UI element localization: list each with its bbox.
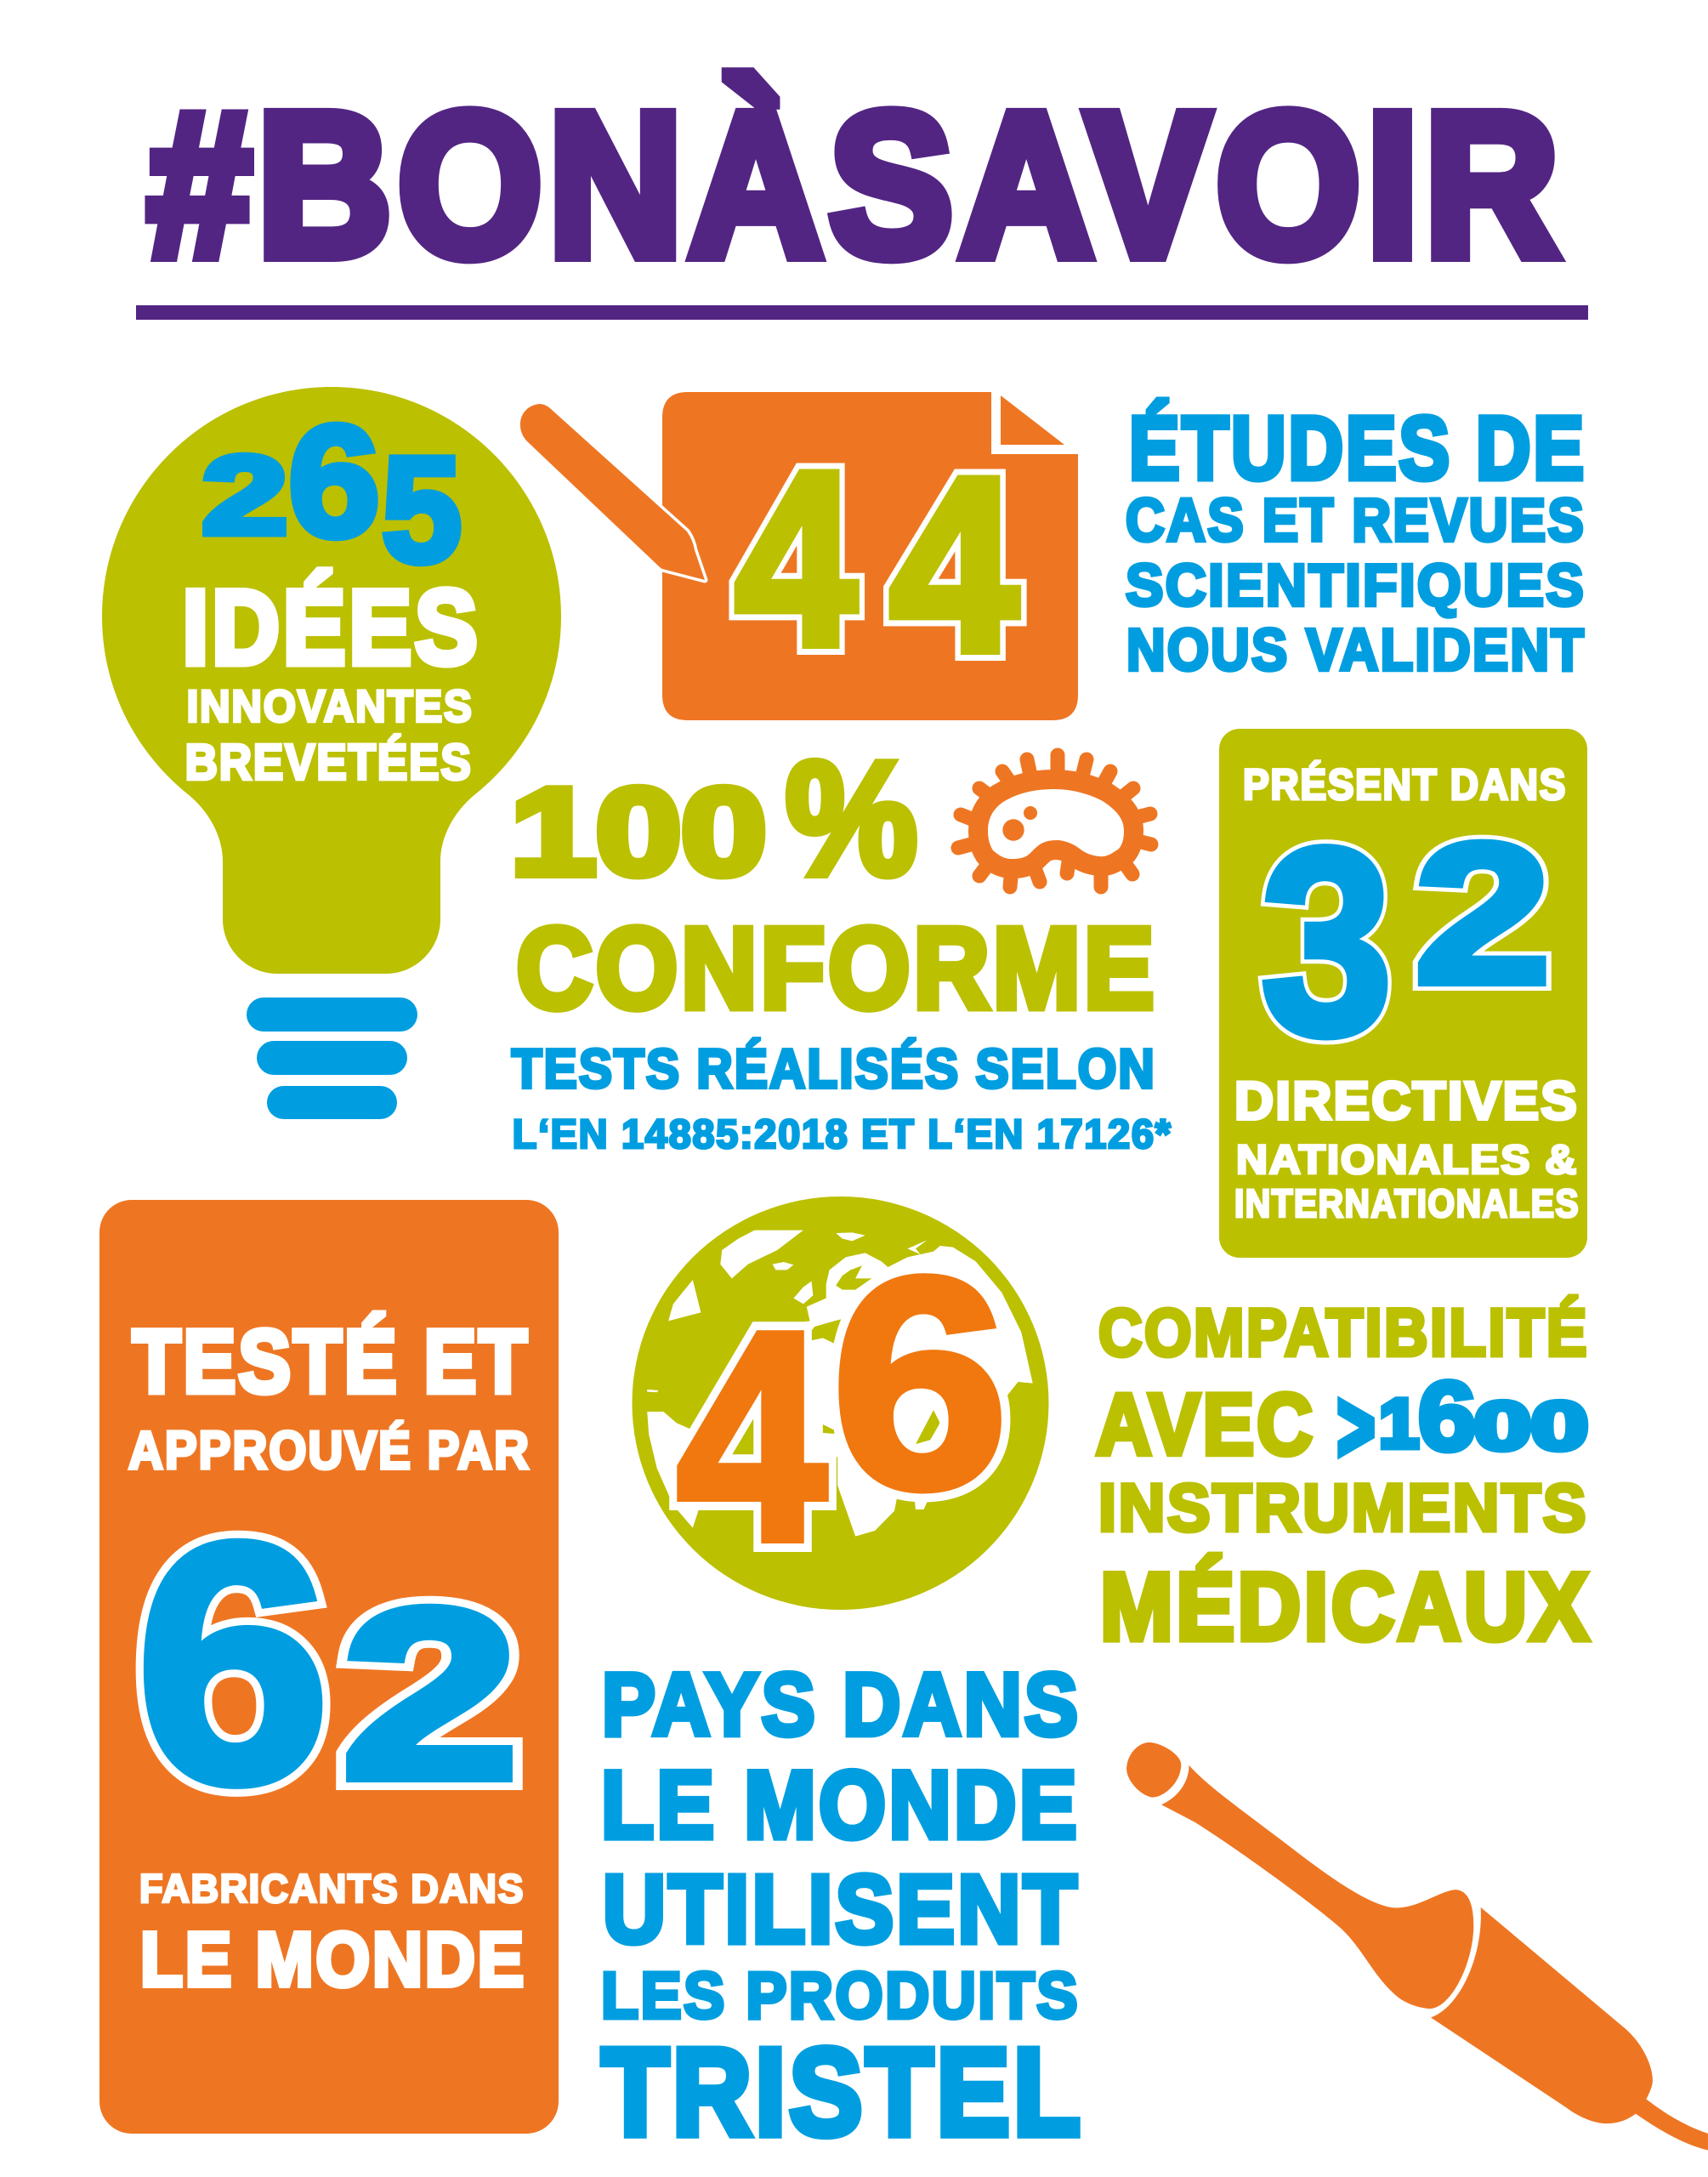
number 32: 2 <box>1415 802 1551 1025</box>
number: >1600: 6 <box>1418 1362 1476 1471</box>
text line: AVEC: AVEC <box>1096 1375 1315 1473</box>
panel: 32 directives <box>1219 729 1587 1258</box>
number: >1600: 00 <box>1474 1388 1588 1464</box>
text line: LES PRODUITS: LES PRODUITS <box>601 1959 1080 2032</box>
icon: document sheet <box>662 392 1078 720</box>
text line: INSTRUMENTS: INSTRUMENTS <box>1098 1469 1588 1545</box>
title underline <box>136 305 1588 320</box>
icon: globe <box>633 1196 1049 1610</box>
panel: light bulb 265 ideas <box>102 387 561 1119</box>
text line: tests selon: TESTS RÉALISÉS SELON <box>512 1037 1156 1100</box>
number 32: 3 <box>1261 794 1393 1090</box>
text block: studies <box>1126 399 1586 683</box>
text line: COMPATIBILITÉ: COMPATIBILITÉ <box>1098 1294 1589 1370</box>
icon: bulb base bars <box>247 998 417 1119</box>
text: FABRICANTS DANS: FABRICANTS DANS <box>139 1867 525 1912</box>
number 62: 6 <box>136 1473 330 1853</box>
text: NATIONALES &: NATIONALES & <box>1236 1138 1578 1183</box>
number 44: 4 <box>890 427 1019 702</box>
number: >1600: > <box>1337 1373 1375 1481</box>
title: #BONÀSAVOIR <box>148 71 1565 298</box>
icon: folded corner <box>1001 395 1064 445</box>
text: TESTÉ ET: TESTÉ ET <box>133 1312 530 1412</box>
text: LE MONDE: LE MONDE <box>140 1918 526 2003</box>
number 32 <box>1261 794 1551 1090</box>
panel: document 44 <box>520 392 1078 720</box>
text line: CAS ET REVUES: CAS ET REVUES <box>1126 486 1586 554</box>
icon: pencil <box>520 404 705 580</box>
icon: ultrasound probe <box>1126 1742 1708 2151</box>
text block: 100% conforme <box>511 729 1172 1157</box>
text: INNOVANTES: INNOVANTES <box>187 681 474 731</box>
panel: globe 46 <box>633 1196 1049 1610</box>
number 100%: % <box>786 729 917 909</box>
number 265: 6 <box>288 394 380 570</box>
text: DIRECTIVES: DIRECTIVES <box>1234 1071 1579 1131</box>
text: BREVETÉES: BREVETÉES <box>185 734 473 790</box>
number 46 <box>677 1215 1008 1603</box>
text line: ÉTUDES DE: ÉTUDES DE <box>1129 399 1586 498</box>
number 44 <box>735 421 1019 702</box>
text block: countries <box>601 1655 1084 2161</box>
text line: PAYS DANS: PAYS DANS <box>602 1655 1081 1754</box>
number 46: 6 <box>831 1215 1008 1550</box>
text block: compatibility <box>1096 1294 1592 1660</box>
number: >1600: 1 <box>1379 1385 1419 1463</box>
text: APPROUVÉ PAR: APPROUVÉ PAR <box>128 1421 531 1481</box>
text line: NOUS VALIDENT: NOUS VALIDENT <box>1126 617 1586 683</box>
number 100%: 100 <box>511 763 767 901</box>
text: PRÉSENT DANS: PRÉSENT DANS <box>1243 760 1567 809</box>
number 62: 2 <box>342 1560 519 1829</box>
number 46: 4 <box>677 1270 828 1603</box>
text: INTERNATIONALES: INTERNATIONALES <box>1234 1181 1580 1225</box>
text: IDÉES: IDÉES <box>182 570 481 687</box>
number 265: 2 <box>202 433 287 557</box>
text line: CONFORME: CONFORME <box>517 904 1158 1032</box>
panel background <box>99 1200 559 2134</box>
text line: UTILISENT: UTILISENT <box>603 1856 1080 1963</box>
panel background <box>1219 729 1587 1258</box>
text line: LE MONDE: LE MONDE <box>601 1752 1080 1858</box>
text line: SCIENTIFIQUES: SCIENTIFIQUES <box>1126 552 1586 618</box>
number 44: 4 <box>735 421 858 696</box>
text line: TRISTEL: TRISTEL <box>602 2023 1084 2161</box>
text line: standards: L‘EN 14885:2018 ET L‘EN 17126* <box>513 1111 1172 1157</box>
number 62 <box>136 1473 519 1853</box>
text line: MÉDICAUX: MÉDICAUX <box>1100 1554 1592 1660</box>
icon: bulb body <box>102 387 561 974</box>
panel: 62 manufacturers <box>99 1200 559 2134</box>
icon: bacterium <box>958 755 1151 887</box>
number 265: 5 <box>382 427 462 594</box>
